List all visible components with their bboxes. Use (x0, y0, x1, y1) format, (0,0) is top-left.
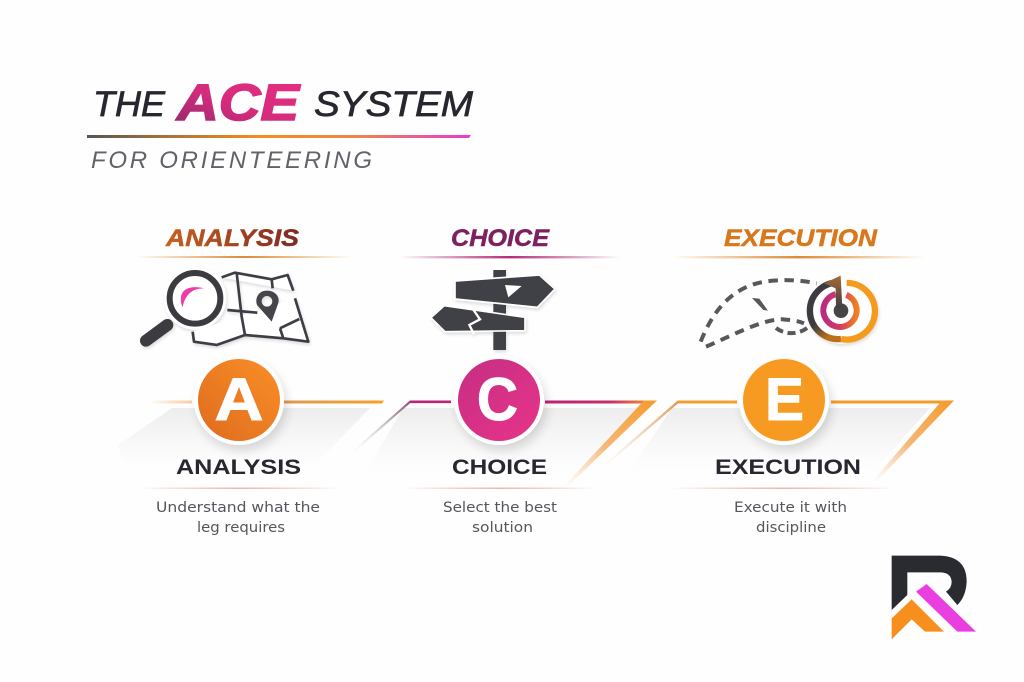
target centre and needle (834, 303, 848, 318)
heading rule (400, 256, 620, 258)
heading text: EXECUTION (724, 225, 878, 252)
panel backgrounds (118, 408, 930, 482)
heading rule (672, 256, 925, 258)
badge circle (739, 355, 829, 445)
description: execution (734, 500, 847, 536)
title gradient rule (87, 135, 471, 138)
label: analysis: ANALYSIS (176, 456, 301, 479)
badge circle (194, 355, 284, 445)
icon: route to target (701, 276, 875, 347)
icon: signpost (431, 270, 555, 350)
badge: A (194, 355, 284, 445)
panel: choice background (360, 408, 637, 482)
title text: ACE: ACE (175, 74, 301, 131)
badge circle (454, 355, 544, 445)
description: choice (443, 500, 557, 536)
description: analysis: Understand what the (156, 500, 320, 516)
icon: magnifier over map (146, 267, 308, 345)
right line (284, 400, 384, 404)
panel: execution background (625, 408, 930, 478)
badge letter: C (477, 366, 518, 433)
label: choice: CHOICE (452, 456, 547, 479)
label: execution: EXECUTION (715, 456, 861, 479)
heading text: ANALYSIS (165, 225, 299, 252)
badge: E (739, 355, 829, 445)
analysis track line (150, 400, 384, 404)
heading text: CHOICE (451, 225, 550, 252)
execution track line (604, 400, 954, 484)
subtitle: FOR ORIENTEERING (91, 147, 372, 174)
description: analysis (156, 500, 320, 536)
left fade (150, 400, 192, 404)
badge letter: E (765, 366, 804, 433)
dashed routes (701, 280, 817, 342)
description: choice: solution (472, 520, 533, 536)
description: execution: Execute it with (734, 500, 847, 516)
title text: THE: THE (93, 85, 166, 124)
target rings (808, 278, 874, 344)
panel: analysis background (118, 408, 370, 475)
badge: C (454, 355, 544, 445)
heading rule (135, 256, 352, 258)
description: choice: Select the best (443, 500, 557, 516)
description: analysis: leg requires (197, 520, 285, 536)
description: execution: discipline (756, 520, 826, 536)
title text: SYSTEM: SYSTEM (314, 85, 474, 124)
logo (892, 556, 976, 639)
title (93, 74, 474, 131)
badge letter: A (214, 366, 264, 433)
choice track line (353, 400, 657, 487)
